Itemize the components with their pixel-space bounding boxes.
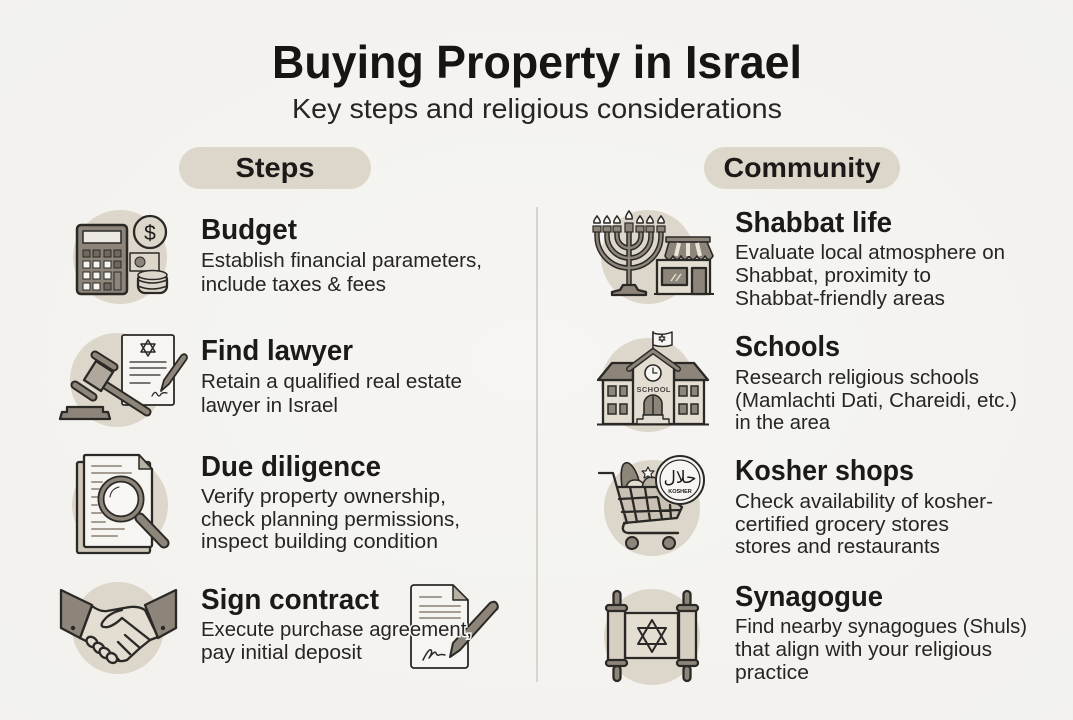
description: Sign contract: pay initial deposit (201, 641, 362, 664)
heading: Find lawyer: Find lawyer (201, 335, 353, 367)
description: Synagogue (735, 615, 1027, 684)
icon: shopping cart and kosher badge (599, 456, 704, 556)
description: Find lawyer (201, 370, 462, 417)
description: Due diligence: inspect building condition (201, 530, 438, 553)
description: Kosher shops: stores and restaurants (735, 535, 940, 558)
heading: Synagogue: Synagogue (735, 581, 883, 613)
description: Due diligence (201, 485, 460, 553)
title: Buying Property in Israel (272, 36, 802, 88)
description: Kosher shops: certified grocery stores (735, 513, 949, 536)
description: Schools (735, 366, 1017, 434)
icon: calculator and money (73, 210, 167, 304)
description: Sign contract (201, 618, 472, 664)
step: Due diligence (72, 451, 460, 553)
description: Shabbat life (735, 241, 1005, 310)
icon: shopping cart and kosher badge: KOSHER (668, 489, 692, 495)
description: Budget: Establish financial parameters, (201, 249, 482, 272)
description: Find lawyer: Retain a qualified real estate (201, 370, 462, 393)
description: Schools: in the area (735, 411, 831, 434)
subtitle: Key steps and religious considerations (292, 93, 782, 124)
description: Find lawyer: lawyer in Israel (201, 394, 338, 417)
icon: handshake (61, 582, 176, 674)
item: Synagogue (604, 581, 1027, 685)
heading: Kosher shops: Kosher shops (735, 455, 914, 487)
heading pill: Steps (179, 147, 371, 189)
description: Kosher shops (735, 490, 993, 558)
heading: Schools: Schools (735, 331, 840, 363)
description: Shabbat life: Evaluate local atmosphere on (735, 241, 1005, 264)
step: Sign contract (61, 582, 498, 674)
description: Due diligence: Verify property ownership, (201, 485, 446, 508)
icon: school building: SCHOOL (636, 385, 671, 394)
heading pill: Community: Community (724, 152, 881, 183)
panel: steps (60, 147, 498, 674)
description: Budget (201, 249, 482, 296)
icon: document and magnifier (72, 455, 168, 553)
description: Schools: (Mamlachti Dati, Chareidi, etc.) (735, 389, 1017, 412)
heading: Sign contract: Sign contract (201, 584, 379, 616)
description: Kosher shops: Check availability of kosher- (735, 490, 993, 513)
description: Budget: include taxes & fees (201, 273, 386, 296)
icon: calculator and money: $ (144, 222, 156, 245)
panel: community (593, 147, 1027, 685)
heading pill: Community (704, 147, 900, 189)
description: Synagogue: practice (735, 661, 809, 684)
item: Schools (597, 331, 1017, 434)
description: Shabbat life: Shabbat, proximity to (735, 264, 931, 287)
divider (536, 207, 538, 682)
icon: signed contract and pen (411, 585, 498, 668)
description: Schools: Research religious schools (735, 366, 979, 389)
heading: Due diligence: Due diligence (201, 451, 381, 483)
step: Budget (73, 210, 482, 304)
item: Kosher shops (599, 455, 993, 558)
step: Find lawyer (60, 333, 462, 427)
description: Shabbat life: Shabbat-friendly areas (735, 287, 945, 310)
description: Synagogue: that align with your religious (735, 638, 992, 661)
description: Due diligence: check planning permissions, (201, 508, 460, 531)
icon: Torah scroll (604, 589, 700, 685)
icon: school building (597, 331, 709, 432)
icon: shopping cart and kosher badge: حلال (663, 468, 697, 488)
description: Synagogue: Find nearby synagogues (Shuls) (735, 615, 1027, 638)
description: Sign contract: Execute purchase agreement, (201, 618, 472, 641)
heading: Budget: Budget (201, 214, 297, 246)
icon: gavel and document (60, 333, 187, 427)
icon: menorah and shop (593, 210, 714, 304)
heading pill: Steps: Steps (236, 152, 314, 183)
heading: Shabbat life: Shabbat life (735, 207, 892, 239)
item: Shabbat life (593, 207, 1005, 310)
